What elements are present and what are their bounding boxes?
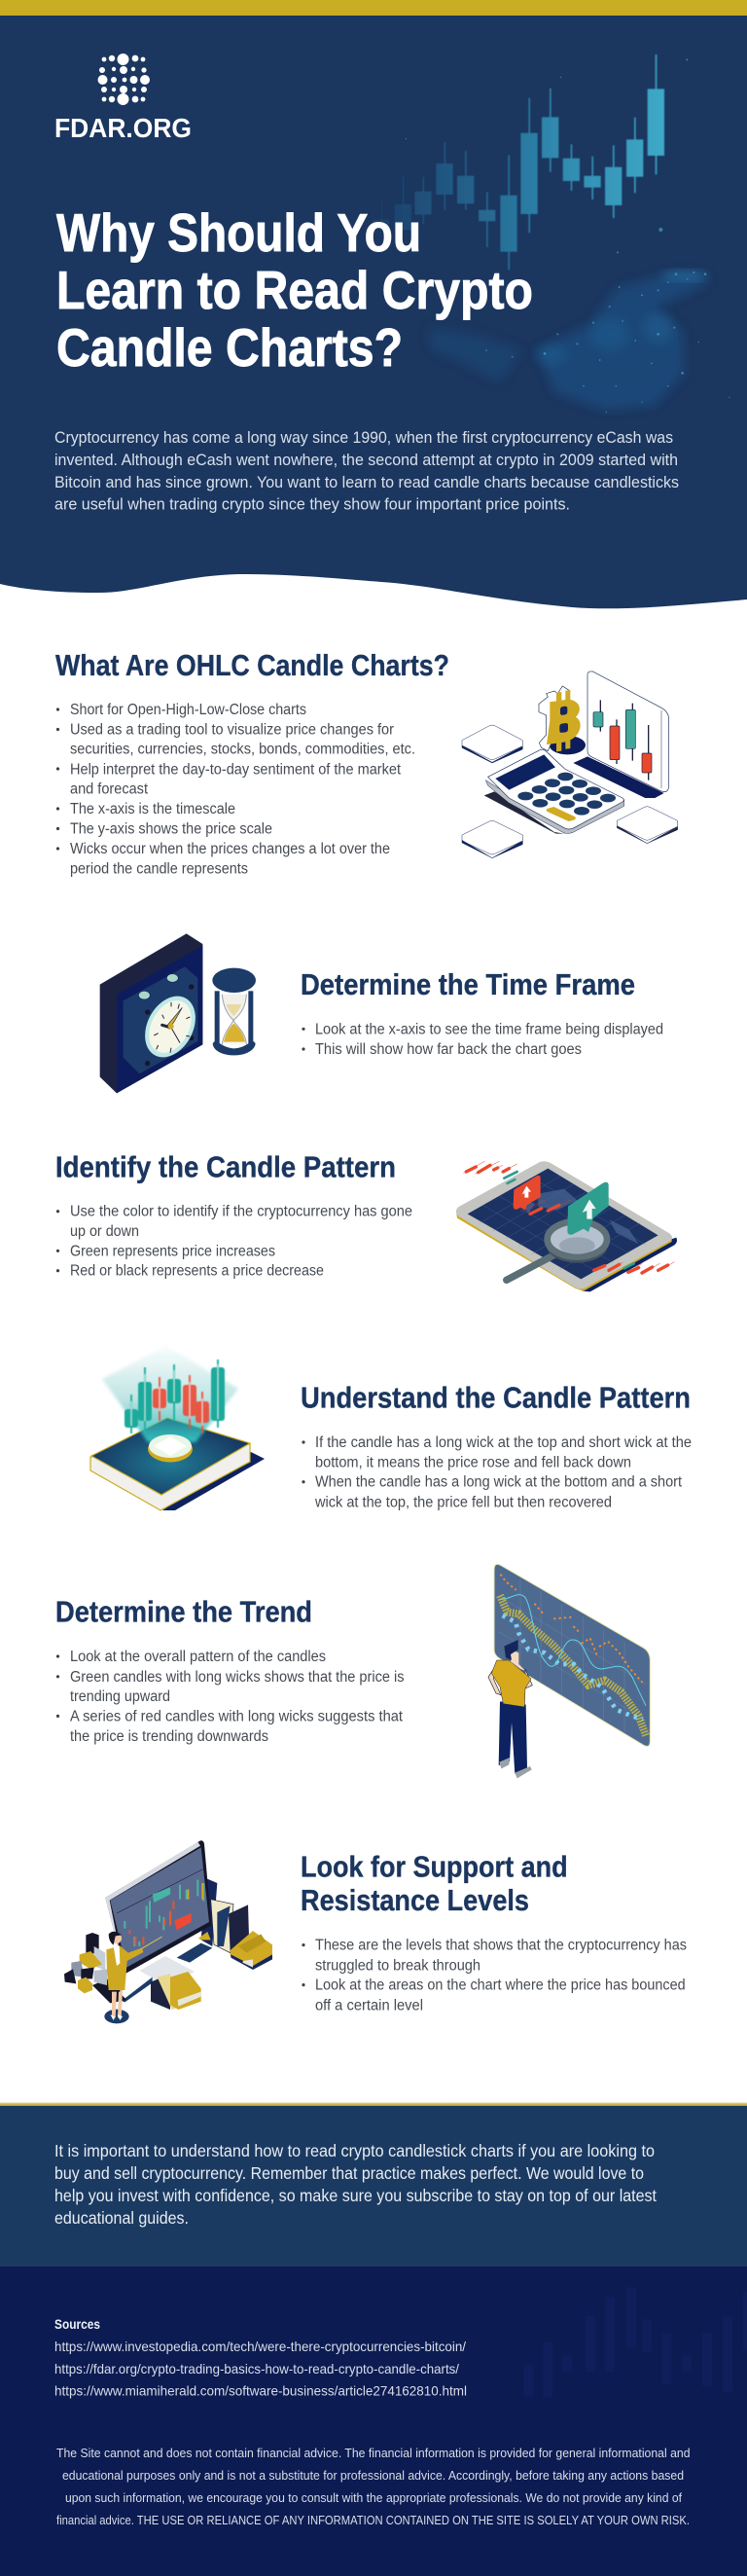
bullet list: support and resistance: struggled to break through [315, 1957, 480, 1974]
sources: https://www.miamiherald.com/software-business/article274162810.html [54, 2383, 467, 2399]
title [56, 202, 533, 378]
glowing candles [124, 1360, 225, 1433]
bullet list: time frame: Look at the x-axis to see the time frame being displayed [315, 1021, 663, 1037]
bullet list: trend: Look at the overall pattern of the candles [70, 1649, 326, 1665]
hero glowing hands [406, 58, 730, 413]
conclusion text: educational guides. [54, 2208, 189, 2228]
monitor [105, 1840, 211, 1974]
bullet list: OHLC: The y-axis shows the price scale [70, 821, 272, 838]
logo mark [97, 54, 150, 105]
disclaimer: The Site cannot and does not contain financial advice. The financial information is provided for general informational and [56, 2446, 691, 2460]
conclusion text: It is important to understand how to read crypto candlestick charts if you are looking to [54, 2141, 655, 2160]
footer panel [0, 2267, 747, 2576]
light pool [148, 1434, 193, 1462]
section heading: time frame: Determine the Time Frame [301, 967, 635, 1001]
section heading: OHLC: What Are OHLC Candle Charts? [55, 648, 449, 682]
bullet list: support and resistance: Look at the areas on the chart where the price has bounced [315, 1977, 686, 1994]
bitcoin [539, 686, 581, 753]
conclusion text: help you invest with confidence, so make sure you subscribe to stay on top of our latest [54, 2186, 657, 2205]
calculator [484, 749, 624, 834]
bullet list: understand: wick at the top, the price fell but then recovered [314, 1494, 612, 1510]
chart board [573, 671, 669, 798]
bullet list: trend: A series of red candles with long wicks suggests that [70, 1708, 404, 1724]
bullet list: OHLC: Short for Open-High-Low-Close charts [70, 702, 306, 718]
section heading: support and resistance: Look for Support and [301, 1850, 568, 1884]
intro text: Cryptocurrency has come a long way since 1990, when the first cryptocurrency eCash was [54, 428, 673, 447]
section heading: identify: Identify the Candle Pattern [55, 1149, 396, 1183]
front book stack [151, 1972, 201, 2010]
top gold bar [0, 0, 747, 16]
sources: https://www.investopedia.com/tech/were-there-cryptocurrencies-bitcoin/ [54, 2339, 466, 2354]
bullet list: trend: Green candles with long wicks shows that the price is [70, 1669, 405, 1686]
bullet list: OHLC: period the candle represents [70, 861, 248, 878]
bullet list: OHLC: securities, currencies, stocks, bonds, commodities, etc. [70, 742, 415, 758]
hourglass [212, 968, 256, 1055]
red alert card [514, 1176, 541, 1210]
clock [100, 933, 205, 1093]
person [488, 1640, 532, 1778]
bullet list: support and resistance [302, 1938, 687, 2014]
icon: person studying trend board [488, 1564, 650, 1778]
bullet list: OHLC: Wicks occur when the prices changes a lot over the [70, 841, 390, 857]
sources: Sources [54, 2316, 100, 2332]
back books [198, 1878, 249, 1953]
disclaimer [56, 2446, 691, 2527]
monitor stand [92, 1943, 212, 2003]
bullet list: identify: Red or black represents a price decrease [70, 1263, 324, 1280]
bullet list: identify [56, 1204, 412, 1280]
bullet list: trend [56, 1649, 405, 1745]
section heading: support and resistance: Resistance Levels [301, 1883, 529, 1917]
intro text: invented. Although eCash went nowhere, the second attempt at crypto in 2009 started with [54, 451, 678, 469]
magnifier [507, 1221, 608, 1280]
icon: tablet with magnifier [456, 1161, 677, 1291]
mini candles [464, 1161, 674, 1274]
light beam [102, 1346, 238, 1442]
icon: presenter with monitor and books [64, 1840, 272, 2023]
bullet list: trend: the price is trending downwards [70, 1728, 268, 1745]
bullet list: understand: When the candle has a long wick at the bottom and a short [315, 1474, 683, 1491]
floating tiles [462, 725, 678, 858]
bullet list: understand: bottom, it means the price rose and fell back down [315, 1454, 631, 1470]
intro text [54, 428, 679, 514]
bullet list: identify: Use the color to identify if the cryptocurrency has gone [70, 1204, 412, 1220]
title: Candle Charts? [56, 317, 403, 378]
conclusion text: buy and sell cryptocurrency. Remember that practice makes perfect. We would love to [54, 2163, 644, 2183]
book [90, 1418, 265, 1510]
cube pile [64, 1933, 107, 1993]
conclusion panel [0, 2102, 747, 2267]
disclaimer: educational purposes only and is not a substitute for professional advice. Accordingly, before taking any actions based [62, 2468, 684, 2483]
hero candlestick chart [373, 54, 664, 270]
bullet list: OHLC: The x-axis is the timescale [70, 801, 235, 817]
logo [54, 54, 192, 143]
section heading: understand: Understand the Candle Pattern [301, 1381, 691, 1415]
title: Why Should You [56, 202, 421, 263]
sources [54, 2316, 467, 2399]
title: Learn to Read Crypto [56, 260, 533, 320]
disclaimer: upon such information, we encourage you to consult with the appropriate professionals. We do not provide any kind of [65, 2490, 682, 2505]
bullet list: time frame [302, 1021, 663, 1058]
bullet list: OHLC: Used as a trading tool to visualize price changes for [70, 721, 394, 738]
section heading: support and resistance [301, 1850, 568, 1917]
bullet list: OHLC: and forecast [70, 781, 149, 798]
intro text: are useful when trading crypto since they show four important price points. [54, 494, 570, 514]
icon: calculator, bitcoin and candle chart [462, 671, 678, 858]
bullet list: identify: Green represents price increases [70, 1243, 275, 1259]
sources: https://fdar.org/crypto-trading-basics-how-to-read-crypto-candle-charts/ [54, 2361, 459, 2376]
bullet list: identify: up or down [70, 1223, 139, 1240]
conclusion text [54, 2141, 657, 2228]
intro text: Bitcoin and has since grown. You want to learn to read candle charts because candlesticks [54, 473, 679, 491]
logo wordmark: FDAR.ORG [54, 113, 192, 143]
bullet list: OHLC [56, 702, 415, 878]
faint candle bars [523, 2287, 747, 2397]
presenter [104, 1932, 162, 2023]
tablet [456, 1161, 677, 1291]
bullet list: understand [302, 1434, 692, 1510]
bullet list: support and resistance: off a certain level [315, 1997, 423, 2014]
hero background [0, 0, 747, 608]
bullet list: trend: trending upward [70, 1688, 170, 1705]
green alert card [567, 1182, 609, 1235]
trend board [494, 1564, 650, 1746]
section heading: trend: Determine the Trend [55, 1594, 312, 1629]
icon: clock and hourglass [100, 933, 256, 1093]
bullet list: OHLC: Help interpret the day-to-day sentiment of the market [70, 761, 402, 778]
book stack right [231, 1931, 272, 1970]
bullet list: support and resistance: These are the levels that shows that the cryptocurrency has [315, 1938, 687, 1954]
bullet list: understand: If the candle has a long wick at the top and short wick at the [315, 1434, 692, 1451]
bullet list: time frame: This will show how far back the chart goes [315, 1041, 582, 1058]
icon: book with holographic candles [90, 1346, 265, 1510]
